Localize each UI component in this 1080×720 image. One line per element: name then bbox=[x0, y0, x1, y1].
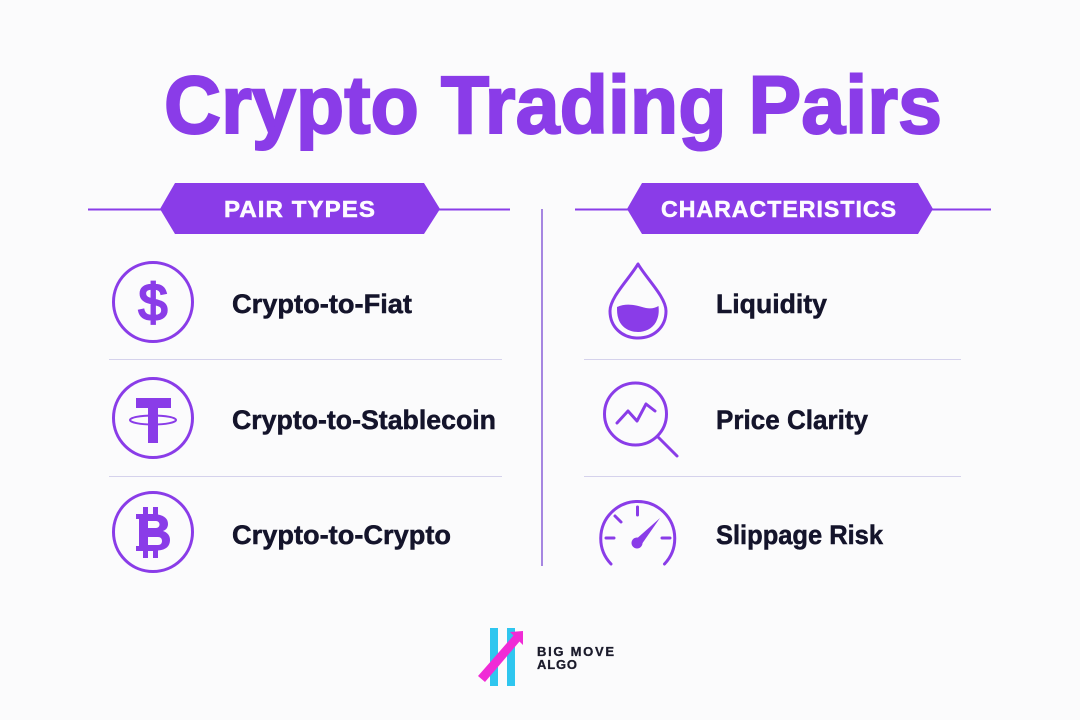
row: crypto-to-stablecoin bbox=[114, 378, 496, 458]
heading: characteristics: CHARACTERISTICS bbox=[661, 196, 897, 222]
heading: pair types bbox=[88, 183, 510, 234]
row: slippage risk: Slippage Risk bbox=[716, 520, 884, 550]
row: crypto-to-crypto bbox=[114, 492, 451, 572]
heading: characteristics bbox=[575, 183, 991, 234]
row: crypto-to-fiat bbox=[114, 262, 412, 342]
logo: big move algo: ALGO bbox=[537, 657, 577, 672]
row: crypto-to-fiat: Crypto-to-Fiat bbox=[232, 289, 412, 319]
row: slippage risk bbox=[601, 501, 884, 564]
panel: pair types bbox=[88, 183, 510, 572]
row: crypto-to-stablecoin: Crypto-to-Stablecoin bbox=[232, 405, 496, 435]
row: liquidity: Liquidity bbox=[716, 289, 827, 319]
row: crypto-to-crypto: Crypto-to-Crypto bbox=[232, 520, 451, 550]
row: crypto-to-fiat: $ bbox=[139, 274, 168, 332]
row: liquidity bbox=[610, 264, 827, 338]
heading: pair types: PAIR TYPES bbox=[224, 196, 376, 222]
row: price clarity bbox=[604, 383, 868, 456]
logo: big move algo: BIG MOVE bbox=[537, 644, 614, 659]
logo: big move algo bbox=[478, 628, 614, 686]
row: price clarity: Price Clarity bbox=[716, 405, 868, 435]
title: Crypto Trading Pairs bbox=[164, 60, 942, 151]
panel: characteristics bbox=[575, 183, 991, 564]
